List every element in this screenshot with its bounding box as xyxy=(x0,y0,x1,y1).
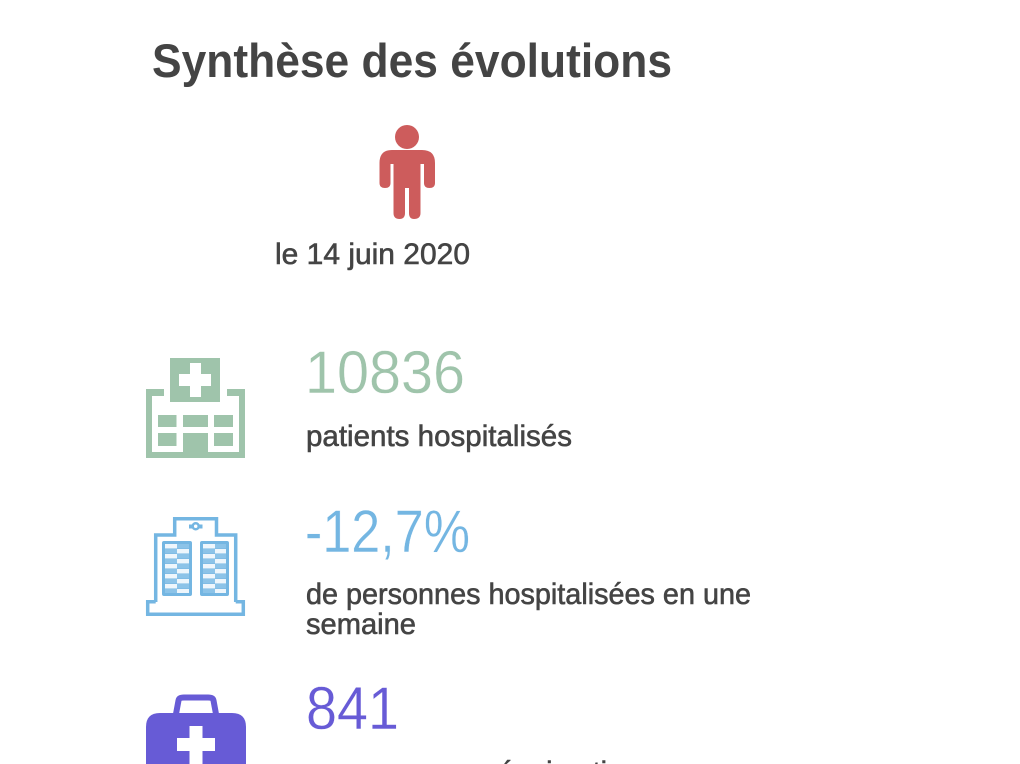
label: weekly change: de personnes hospitalisées en une xyxy=(306,578,751,611)
date: le 14 juin 2020 xyxy=(275,238,470,271)
title: Synthèse des évolutions xyxy=(152,34,672,87)
icon: hospital xyxy=(146,358,245,458)
label: weekly change xyxy=(306,578,751,641)
label: weekly change: semaine xyxy=(306,608,416,641)
icon: hospital building xyxy=(148,519,243,614)
value: intensive care: 841 xyxy=(306,675,399,742)
icon: medical case xyxy=(146,698,246,764)
value: weekly change: -12,7% xyxy=(305,498,470,565)
icon: person xyxy=(380,125,435,219)
value: hospitalised patients: 10836 xyxy=(305,339,465,406)
label: hospitalised patients: patients hospitalisés xyxy=(306,420,572,453)
